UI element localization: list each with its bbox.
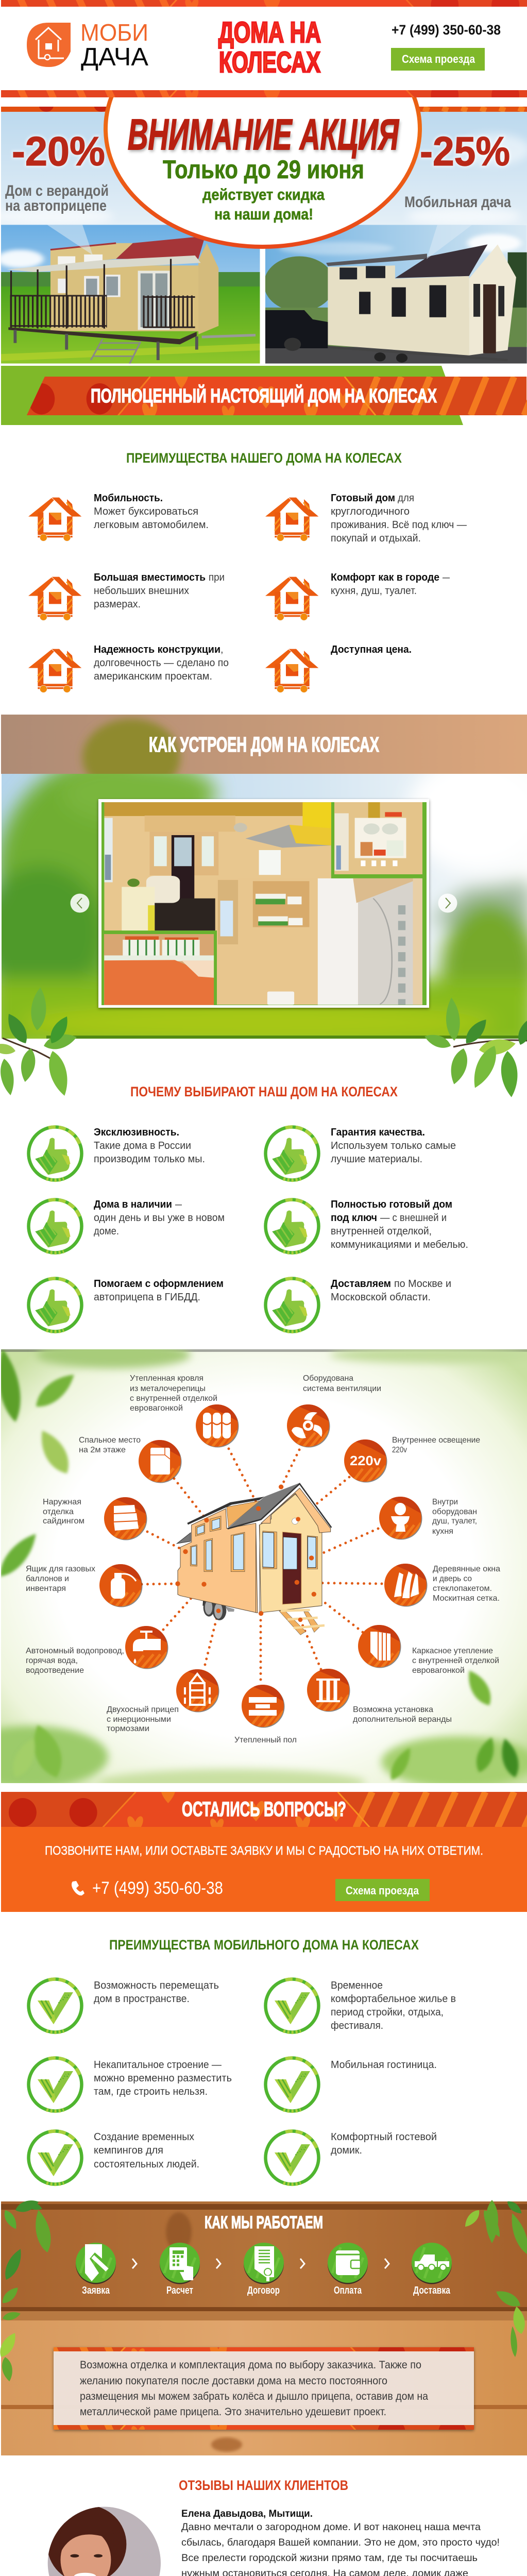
reason: in stock [94, 1199, 225, 1237]
discount left: -20% [12, 128, 105, 174]
labels: душ, туалет, [432, 1517, 477, 1526]
labels: Утепленная кровля [130, 1374, 203, 1383]
logo: ДАЧА [81, 43, 148, 71]
benefit 6 [331, 2131, 437, 2156]
advantage: reliability: , [220, 644, 224, 655]
benefit 6: Комфортный гостевой [331, 2131, 437, 2143]
header title: ДОМА НА [218, 16, 321, 49]
labels: Возможна установка [353, 1705, 433, 1714]
header bands and background [0, 0, 527, 118]
badge: roof [196, 1404, 240, 1448]
icon: house 5 [28, 649, 81, 692]
reason: in stock: один день и вы уже в новом [94, 1212, 225, 1224]
benefit 3: там, где строить нельзя. [94, 2086, 208, 2097]
slider arrow right [438, 893, 457, 913]
reason: quality [331, 1127, 456, 1165]
arrow [216, 2259, 220, 2268]
advantage: capacity [94, 572, 225, 610]
labels [26, 1374, 500, 1744]
icon: check 1 [29, 1979, 81, 2032]
labels: водоотведение [26, 1666, 84, 1675]
arrow [300, 2259, 304, 2268]
advantage: ready house: покупай и отдыхай. [331, 533, 421, 544]
reason: exclusive: Такие дома в России [94, 1140, 191, 1151]
discount left [5, 128, 109, 214]
advantage: comfort: Комфорт как в городе [331, 572, 439, 583]
labels: Каркасное утепление [412, 1647, 493, 1655]
background with leaves [1, 1349, 527, 1783]
discount right: -25% [420, 128, 510, 174]
icon: check 4 [266, 2058, 318, 2111]
labels: с инерционными [107, 1715, 171, 1724]
panel: house anatomy infographic [0, 1342, 527, 1796]
benefit 2: фестиваля. [331, 2020, 383, 2031]
tiny house illustration [175, 1483, 331, 1635]
logo [27, 19, 148, 71]
leaves right [423, 997, 527, 1098]
reason: delivery: Доставляем [331, 1278, 391, 1290]
labels: Ящик для газовых [26, 1565, 95, 1573]
step 2: calculation [160, 2243, 200, 2296]
leaves left [0, 987, 78, 1098]
advantage: reliability [94, 644, 229, 682]
note box [0, 2328, 474, 2455]
labels: стеклопакетом. [433, 1584, 492, 1593]
reason: quality: лучшие материалы. [331, 1154, 422, 1165]
promo sky panel [0, 112, 527, 226]
icon: house 4 [265, 577, 318, 620]
advantage: ready house: проживания. Всё под ключ — [331, 519, 467, 531]
labels: отделка [43, 1507, 74, 1516]
benefit 1 [94, 1980, 219, 2005]
badge: bathroom [379, 1496, 423, 1540]
reason: turnkey: коммуникациями и мебелью. [331, 1239, 468, 1250]
labels: с внутренней отделкой [412, 1656, 499, 1665]
reason: delivery [331, 1278, 451, 1303]
labels: Внутри [432, 1498, 458, 1506]
badge: siding [104, 1497, 148, 1541]
benefit 2: период стройки, отдыха, [331, 2007, 444, 2018]
advantage: reliability: американским проектам. [94, 671, 212, 682]
green ribbon [1, 366, 527, 425]
icon: thumb 5 [29, 1278, 81, 1332]
reason: in stock: доме. [94, 1226, 119, 1237]
labels: система вентиляции [303, 1384, 381, 1393]
note box: размещения мы можем забрать колёса и дышло прицепа, оставив дом на [80, 2391, 428, 2402]
heading band: КАК УСТРОЕН ДОМ НА КОЛЕСАХ [149, 733, 379, 756]
slider arrow left [70, 893, 90, 913]
reason: exclusive: Эксклюзивность. [94, 1127, 179, 1138]
promo text: Только до 29 июня [163, 155, 364, 184]
labels: на 2м этаже [79, 1446, 126, 1454]
icon: thumb 3 [29, 1199, 81, 1253]
labels: дополнительной веранды [353, 1715, 452, 1724]
labels: Внутреннее освещение [392, 1436, 480, 1445]
step 3: contract: Договор [247, 2285, 280, 2296]
review: Elena: Давно мечтали о загородном доме. И вот наконец наша мечта [181, 2521, 481, 2533]
step 1: application: Заявка [82, 2285, 110, 2296]
advantage: comfort: — [443, 572, 450, 583]
reason: turnkey: под ключ [331, 1212, 377, 1224]
reason: delivery: по Москве и [394, 1278, 451, 1290]
advantage: comfort: кухня, душ, туалет. [331, 585, 417, 597]
labels: 220v [392, 1446, 407, 1454]
benefit 2: Временное [331, 1980, 383, 1991]
header title [218, 16, 321, 79]
badge: frame insulation [358, 1624, 402, 1669]
reason: in stock: Дома в наличии [94, 1199, 172, 1210]
discount right: -25% [420, 128, 510, 174]
reason: turnkey: — с внешней и [380, 1212, 447, 1224]
header button: Схема проезда [402, 53, 475, 65]
advantage: capacity: Большая вместимость [94, 572, 206, 583]
labels: оборудован [432, 1507, 477, 1516]
labels: тормозами [107, 1724, 149, 1733]
icon: check 6 [266, 2131, 318, 2184]
heading band [1, 715, 527, 796]
promo text: действует скидка [202, 185, 325, 204]
benefit 3 [94, 2059, 232, 2097]
heading: mobile house advantages: ПРЕИМУЩЕСТВА МОБИЛЬНОГО ДОМА НА КОЛЕСАХ [109, 1937, 419, 1953]
header phone: +7 (499) 350-60-38 [392, 22, 501, 38]
benefit 4: Мобильная гостиница. [331, 2059, 437, 2071]
badge: ventilation [287, 1404, 331, 1448]
icon: house 2 [265, 498, 318, 541]
step 5: delivery: Доставка [413, 2285, 451, 2296]
step 1: application [76, 2243, 116, 2296]
note box: желанию покупателя после доставки дома на место постоянного [80, 2375, 387, 2387]
advantage: comfort [331, 572, 450, 597]
advantage: ready house: для [398, 493, 414, 504]
labels: Автономный водопровод, [26, 1647, 124, 1655]
section: how it is built [0, 715, 527, 1098]
reason: paperwork [94, 1278, 224, 1303]
reason: in stock: — [175, 1199, 182, 1210]
advantage: ready house [331, 493, 467, 544]
reason: quality: Гарантия качества. [331, 1127, 425, 1138]
interior collage [98, 799, 429, 1008]
labels: Двухосный прицеп [107, 1705, 179, 1714]
benefit 2 [331, 1980, 456, 2031]
labels: инвентаря [26, 1584, 66, 1593]
scene background [2, 774, 527, 1039]
benefit 2: комфортабельное жилье в [331, 1993, 456, 2005]
reason: quality: Используем только самые [331, 1140, 456, 1151]
advantage: ready house: круглогодичного [331, 506, 410, 517]
icon: check 3 [29, 2058, 81, 2111]
advantage: reliability: Надежность конструкции [94, 644, 220, 655]
panel: contact [1, 1786, 527, 1912]
badge: gas cylinder [99, 1564, 144, 1608]
labels: Москитная сетка. [433, 1594, 500, 1603]
labels: горячая вода, [26, 1656, 78, 1665]
header button [391, 48, 485, 71]
panel: how we work [0, 2197, 527, 2455]
icon: check 2 [266, 1979, 318, 2032]
advantage: capacity: небольших внешних [94, 585, 189, 597]
reason: exclusive [94, 1127, 205, 1165]
benefit 5 [94, 2131, 199, 2170]
promo oval [104, 97, 422, 249]
arrow [385, 2259, 389, 2268]
icon: check 5 [29, 2131, 81, 2184]
badge: floor [242, 1684, 286, 1728]
note box: Возможна отделка и комплектация дома по выбору заказчика. Также по [80, 2359, 421, 2371]
badge: water tap [125, 1625, 169, 1670]
discount left: на автоприцепе [5, 197, 107, 214]
advantage: price: Доступная цена. [331, 644, 412, 655]
reason: turnkey: Полностью готовый дом [331, 1199, 452, 1210]
heading: reviews: ОТЗЫВЫ НАШИХ КЛИЕНТОВ [179, 2478, 348, 2493]
advantage: capacity: при [209, 572, 225, 583]
promo text: на наши дома! [214, 205, 313, 223]
labels: Утепленный пол [234, 1736, 297, 1744]
benefit 3: можно временно разместить [94, 2073, 232, 2084]
labels: кухня [432, 1527, 453, 1536]
labels: евровагонкой [412, 1666, 465, 1675]
benefit 1: дом в пространстве. [94, 1993, 190, 2005]
labels: Деревянные окна [433, 1565, 500, 1573]
icon: thumb 1 [29, 1127, 81, 1180]
heading: why choose: ПОЧЕМУ ВЫБИРАЮТ НАШ ДОМ НА КОЛЕСАХ [130, 1084, 398, 1099]
reason: exclusive: производим только мы. [94, 1154, 205, 1165]
advantage: mobility [94, 493, 209, 531]
benefit 1: Возможность перемещать [94, 1980, 219, 1991]
discount left: Дом с верандой [5, 182, 109, 199]
benefit 3: Некапитальное строение — [94, 2059, 222, 2071]
advantage: mobility: Мобильность. [94, 493, 163, 504]
benefit 6: домик. [331, 2145, 362, 2156]
header title: КОЛЕСАХ [219, 46, 320, 79]
review: Elena: Все прелести городской жизни прямо там, где ты посчитаешь [181, 2552, 478, 2564]
discount left: -20% [12, 128, 105, 174]
badge: wooden windows [384, 1563, 429, 1607]
review: Elena: Елена Давыдова, Мытищи. [181, 2508, 313, 2519]
labels: сайдингом [43, 1517, 84, 1526]
wood background [1, 2201, 527, 2455]
advantage: capacity: размерах. [94, 599, 141, 610]
icon: phone [72, 1881, 84, 1895]
icon: thumb 2 [266, 1127, 318, 1180]
labels: Наружная [43, 1498, 81, 1506]
icon: thumb 4 [266, 1199, 318, 1253]
labels: Оборудована [303, 1374, 353, 1383]
reason: turnkey [331, 1199, 468, 1250]
promo text [128, 110, 400, 223]
labels: и дверь со [433, 1574, 472, 1583]
badge: 220v lighting [344, 1439, 388, 1483]
badge: trailer [176, 1669, 220, 1713]
icon: thumb 6 [266, 1278, 318, 1332]
reason: turnkey: внутренней отделкой, [331, 1226, 432, 1237]
photo: mobile dacha with truck [264, 225, 527, 364]
badge: veranda [307, 1668, 351, 1713]
badge: 220v lighting: 220v [350, 1453, 382, 1468]
photo: house with veranda [0, 225, 260, 364]
advantage: ready house: Готовый дом [331, 493, 395, 504]
contact button: Схема проезда [346, 1884, 419, 1897]
benefit 5: кемпингов для [94, 2145, 163, 2156]
reason: delivery: Московской области. [331, 1292, 431, 1303]
labels: баллонов и [26, 1574, 69, 1583]
labels: евровагонкой [130, 1404, 183, 1413]
photo: Elena [47, 2505, 161, 2576]
heading: КАК МЫ РАБОТАЕМ [205, 2213, 323, 2232]
reason: paperwork: автоприцепа в ГИБДД. [94, 1292, 200, 1303]
arrow [132, 2259, 137, 2268]
contact phone: +7 (499) 350-60-38 [92, 1878, 223, 1898]
step 4: payment: Оплата [334, 2285, 362, 2296]
review: Elena [181, 2508, 500, 2576]
benefit 5: состоятельных людей. [94, 2159, 199, 2170]
logo: МОБИ [80, 19, 148, 46]
dotted connectors [142, 1449, 382, 1680]
step 5: delivery [412, 2243, 452, 2296]
step 2: calculation: Расчет [166, 2285, 193, 2296]
icon: house 1 [28, 498, 81, 541]
step 4: payment [328, 2243, 368, 2296]
labels: Спальное место [79, 1436, 141, 1445]
promo tails [47, 225, 472, 259]
reason: paperwork: Помогаем с оформлением [94, 1278, 224, 1290]
advantage: mobility: легковым автомобилем. [94, 519, 209, 531]
note box: металлической раме прицепа. Это значительно удешевит проект. [80, 2406, 386, 2418]
panel: contact: ОСТАЛИСЬ ВОПРОСЫ? [182, 1798, 346, 1821]
heading: advantages: ПРЕИМУЩЕСТВА НАШЕГО ДОМА НА КОЛЕСАХ [126, 450, 402, 466]
contact button [335, 1879, 430, 1901]
badge: sleeping place [139, 1439, 183, 1484]
labels: из металочерепицы [130, 1384, 206, 1393]
review: Elena: сбылась, благодаря Вашей компании. Это не дом, это просто чудо! [181, 2537, 500, 2548]
labels: с внутренней отделкой [130, 1394, 217, 1403]
advantage: reliability: долговечность — сделано по [94, 657, 229, 669]
leaves on wood [0, 2197, 527, 2382]
icon: house 3 [28, 577, 81, 620]
advantage: mobility: Может буксироваться [94, 506, 198, 517]
icon: house 6 [265, 649, 318, 692]
discount right [404, 128, 511, 211]
step 3: contract [244, 2243, 284, 2296]
benefit 5: Создание временных [94, 2131, 194, 2143]
